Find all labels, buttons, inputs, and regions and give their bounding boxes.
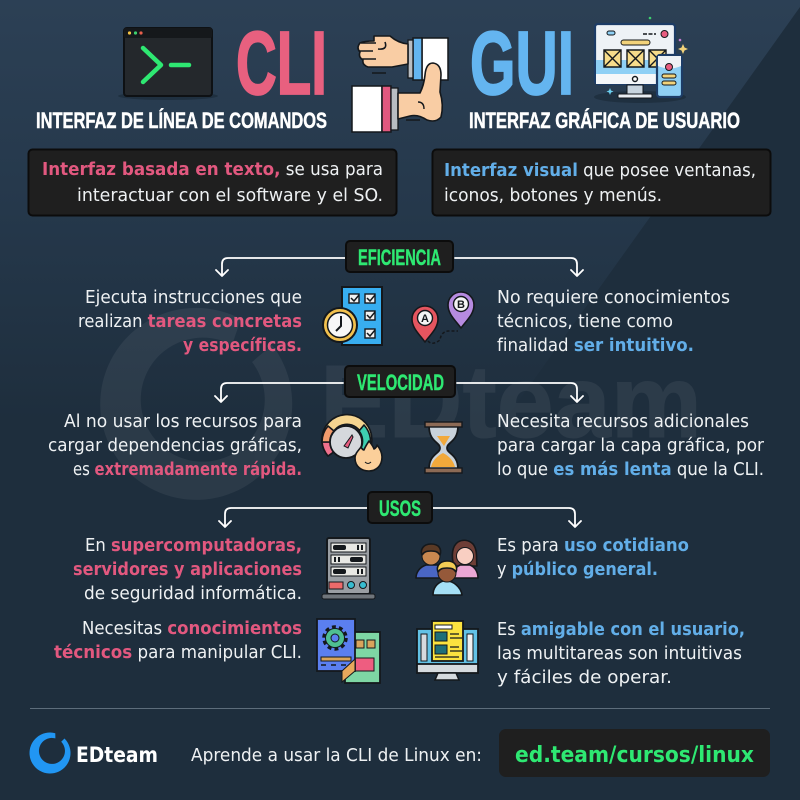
arrows: eficiencia xyxy=(216,258,583,276)
text: CLI velocidad: Al no usar los recursos para xyxy=(64,411,302,432)
text: CLI velocidad: es extremadamente rápida. xyxy=(73,459,302,480)
text: CLI usos conocimientos: técnicos para manipular CLI. xyxy=(54,642,302,663)
icon: map pins A and B: B xyxy=(457,299,465,311)
icon: server rack xyxy=(322,538,375,599)
panel: CLI definition: Interfaz basada en texto, se usa para xyxy=(42,159,383,180)
text: GUI usos cotidiano xyxy=(497,535,689,580)
text: GUI usos amigable: y fáciles de operar. xyxy=(497,667,672,688)
text: GUI usos amigable: Es amigable con el usuario, xyxy=(497,619,745,640)
label: USOS xyxy=(368,492,432,523)
logo: EDteam: EDteam xyxy=(76,743,158,767)
panel: GUI definition: iconos, botones y menús. xyxy=(444,185,662,206)
icon: terminal window xyxy=(118,28,218,100)
callout: course url: ed.team/cursos/linux xyxy=(515,743,754,768)
subheading: CLI: INTERFAZ DE LÍNEA DE COMANDOS xyxy=(36,108,327,133)
text: GUI velocidad: Necesita recursos adicionales xyxy=(497,411,749,432)
label: EFICIENCIA xyxy=(346,241,453,272)
watermark: EDteam logo xyxy=(100,308,702,500)
icon: manuals with gear xyxy=(317,619,380,683)
callout: course url xyxy=(499,729,770,777)
text: CLI usos conocimientos xyxy=(54,618,302,663)
text: CLI eficiencia: Ejecuta instrucciones que xyxy=(85,287,302,308)
logo: EDteam xyxy=(30,733,158,774)
icon: people group xyxy=(416,540,478,595)
text: GUI usos cotidiano: Es para uso cotidiano xyxy=(497,535,689,556)
text: CLI eficiencia xyxy=(78,287,302,356)
text: GUI velocidad: lo que es más lenta que la CLI. xyxy=(497,459,764,480)
text: CLI eficiencia: realizan tareas concretas xyxy=(78,311,302,332)
icon: handshake of fist and thumb xyxy=(352,36,448,132)
text: GUI usos amigable: las multitareas son intuitivas xyxy=(497,643,742,664)
text: GUI usos cotidiano: y público general. xyxy=(497,559,658,580)
panel: GUI definition xyxy=(432,150,770,216)
icon: map pins A and B xyxy=(412,292,474,343)
text: GUI eficiencia: No requiere conocimientos xyxy=(497,287,730,308)
panel: CLI definition: interactuar con el software y el SO. xyxy=(77,185,383,206)
icon: hourglass xyxy=(425,422,462,473)
heading: GUI: GUI xyxy=(470,14,574,114)
icon: monitor with interface xyxy=(417,621,478,680)
text: GUI eficiencia: finalidad ser intuitivo. xyxy=(497,335,694,356)
panel: CLI definition xyxy=(28,150,396,216)
text: CLI usos supercomputadoras xyxy=(73,535,302,604)
icon: speed gauge with flame xyxy=(322,415,382,471)
icon: map pins A and B: A xyxy=(421,313,429,325)
watermark: EDteam logo: EDteam xyxy=(320,344,702,459)
text: CLI velocidad xyxy=(48,411,302,480)
arrows: usos xyxy=(219,508,581,527)
text: GUI velocidad: para cargar la capa gráfica, por xyxy=(497,435,765,456)
label: EFICIENCIA: EFICIENCIA xyxy=(358,245,441,270)
text: GUI usos amigable xyxy=(497,619,745,688)
label: USOS: USOS xyxy=(379,496,421,521)
icon: checklist and clock xyxy=(323,287,382,345)
text: GUI eficiencia: técnicos, tiene como xyxy=(497,311,673,332)
text: CLI velocidad: cargar dependencias gráficas, xyxy=(48,435,302,456)
label: VELOCIDAD: VELOCIDAD xyxy=(357,370,444,395)
panel: GUI definition: Interfaz visual que posee ventanas, xyxy=(444,160,756,181)
label: VELOCIDAD xyxy=(345,366,455,397)
text: footer call to action: Aprende a usar la CLI de Linux en: xyxy=(191,745,482,766)
text: GUI velocidad xyxy=(497,411,765,480)
text: CLI usos supercomputadoras: de seguridad informática. xyxy=(84,583,302,604)
text: GUI eficiencia xyxy=(497,287,730,356)
text: CLI eficiencia: y específicas. xyxy=(183,335,302,356)
text: CLI usos conocimientos: Necesitas conocimientos xyxy=(82,618,302,639)
heading: CLI: CLI xyxy=(236,14,327,114)
text: CLI usos supercomputadoras: En supercomputadoras, xyxy=(85,535,302,556)
text: CLI usos supercomputadoras: servidores y aplicaciones xyxy=(73,559,302,580)
arrows: velocidad xyxy=(215,383,583,402)
icon: GUI monitor and phone xyxy=(594,17,688,103)
